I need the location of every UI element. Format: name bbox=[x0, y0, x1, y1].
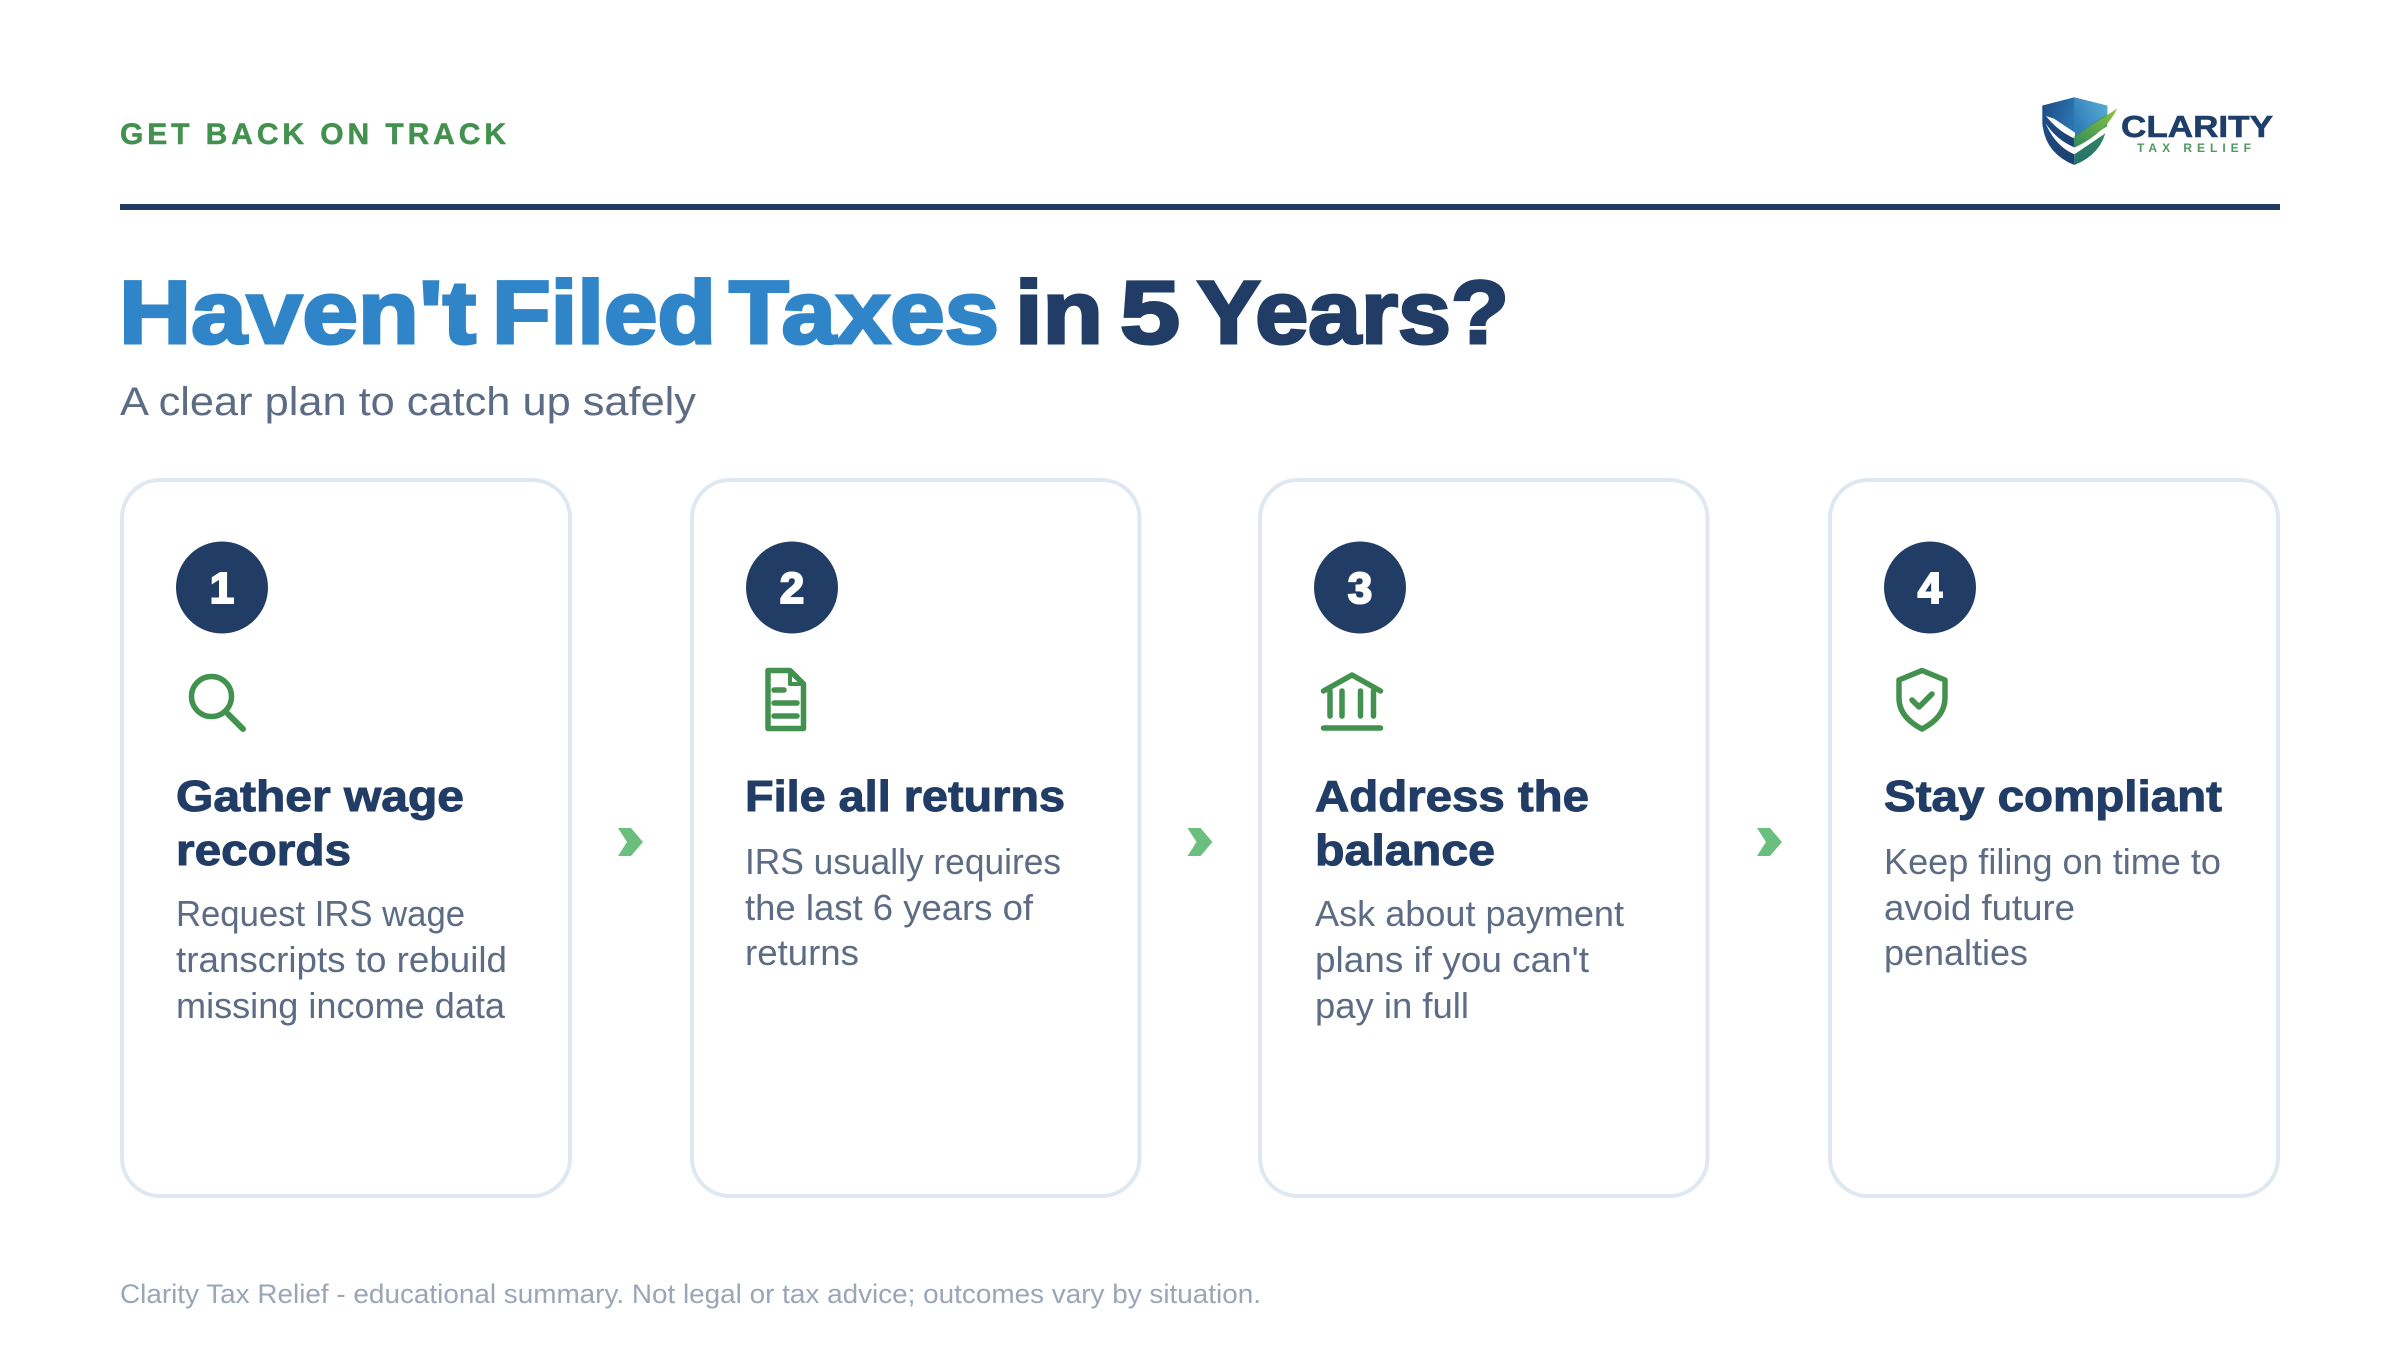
title: Haven't bbox=[119, 262, 476, 362]
icon: bank building bbox=[1324, 675, 1380, 728]
body text bbox=[1884, 841, 2221, 973]
heading: gather wage records: records bbox=[176, 826, 351, 875]
heading: address the balance bbox=[1315, 772, 1589, 875]
body text bbox=[1315, 893, 1624, 1026]
step number 4: 4 bbox=[1918, 564, 1943, 613]
body text: returns bbox=[745, 932, 859, 973]
panel: step 1 bbox=[122, 480, 570, 1196]
body text: the last 6 years of bbox=[745, 887, 1034, 928]
body text: missing income data bbox=[176, 985, 506, 1026]
body text: plans if you can't bbox=[1315, 939, 1589, 980]
step number 3: 3 bbox=[1348, 564, 1372, 613]
logo wordmark: CLARITY bbox=[2121, 109, 2273, 144]
step number 1 bbox=[176, 542, 268, 634]
panel: step 4 bbox=[1830, 480, 2278, 1196]
title: Years? bbox=[1197, 262, 1509, 362]
icon: document bbox=[768, 670, 804, 728]
eyebrow label: GET BACK ON TRACK bbox=[120, 118, 506, 151]
footer disclaimer: Clarity Tax Relief - educational summary. Not legal or tax advice; outcomes vary by situation. bbox=[120, 1279, 1261, 1309]
title: in bbox=[1015, 262, 1103, 362]
arrow 3 to 4 bbox=[1757, 828, 1782, 856]
body text: avoid future bbox=[1884, 887, 2075, 928]
heading: address the balance: balance bbox=[1315, 826, 1495, 875]
icon: shield with check mark bbox=[2042, 97, 2117, 165]
step number 2 bbox=[746, 542, 838, 634]
step number 2: 2 bbox=[780, 564, 804, 613]
body text: penalties bbox=[1884, 932, 2028, 973]
heading: file all returns: File all returns bbox=[745, 772, 1065, 821]
heading: stay compliant: Stay compliant bbox=[1884, 772, 2222, 821]
body text: pay in full bbox=[1315, 985, 1469, 1026]
heading: gather wage records bbox=[176, 772, 464, 875]
logo tagline: TAX RELIEF bbox=[2137, 141, 2251, 155]
logo: Clarity Tax Relief bbox=[2042, 97, 2273, 165]
step number 3 bbox=[1314, 542, 1406, 634]
body text: Request IRS wage bbox=[176, 893, 465, 934]
body text: transcripts to rebuild bbox=[176, 939, 507, 980]
panel: step 3 bbox=[1260, 480, 1708, 1196]
arrow 2 to 3 bbox=[1188, 828, 1212, 856]
heading: gather wage records: Gather wage bbox=[176, 772, 464, 821]
body text: IRS usually requires bbox=[745, 841, 1061, 882]
body text: Keep filing on time to bbox=[1884, 841, 2221, 882]
title: Taxes bbox=[729, 262, 999, 362]
panel: step 2 bbox=[692, 480, 1140, 1196]
step number 4 bbox=[1884, 542, 1976, 634]
body text: Ask about payment bbox=[1315, 893, 1624, 934]
body text bbox=[745, 841, 1061, 973]
heading: address the balance: Address the bbox=[1315, 772, 1589, 821]
body text bbox=[176, 893, 507, 1026]
subtitle: A clear plan to catch up safely bbox=[120, 380, 696, 424]
title: 5 bbox=[1120, 262, 1180, 362]
title bbox=[119, 262, 1509, 362]
arrow 1 to 2 bbox=[618, 828, 643, 856]
icon: shield check bbox=[1899, 670, 1945, 729]
step number 1: 1 bbox=[210, 564, 234, 613]
title: Filed bbox=[492, 262, 716, 362]
icon: magnifying glass bbox=[192, 676, 243, 729]
